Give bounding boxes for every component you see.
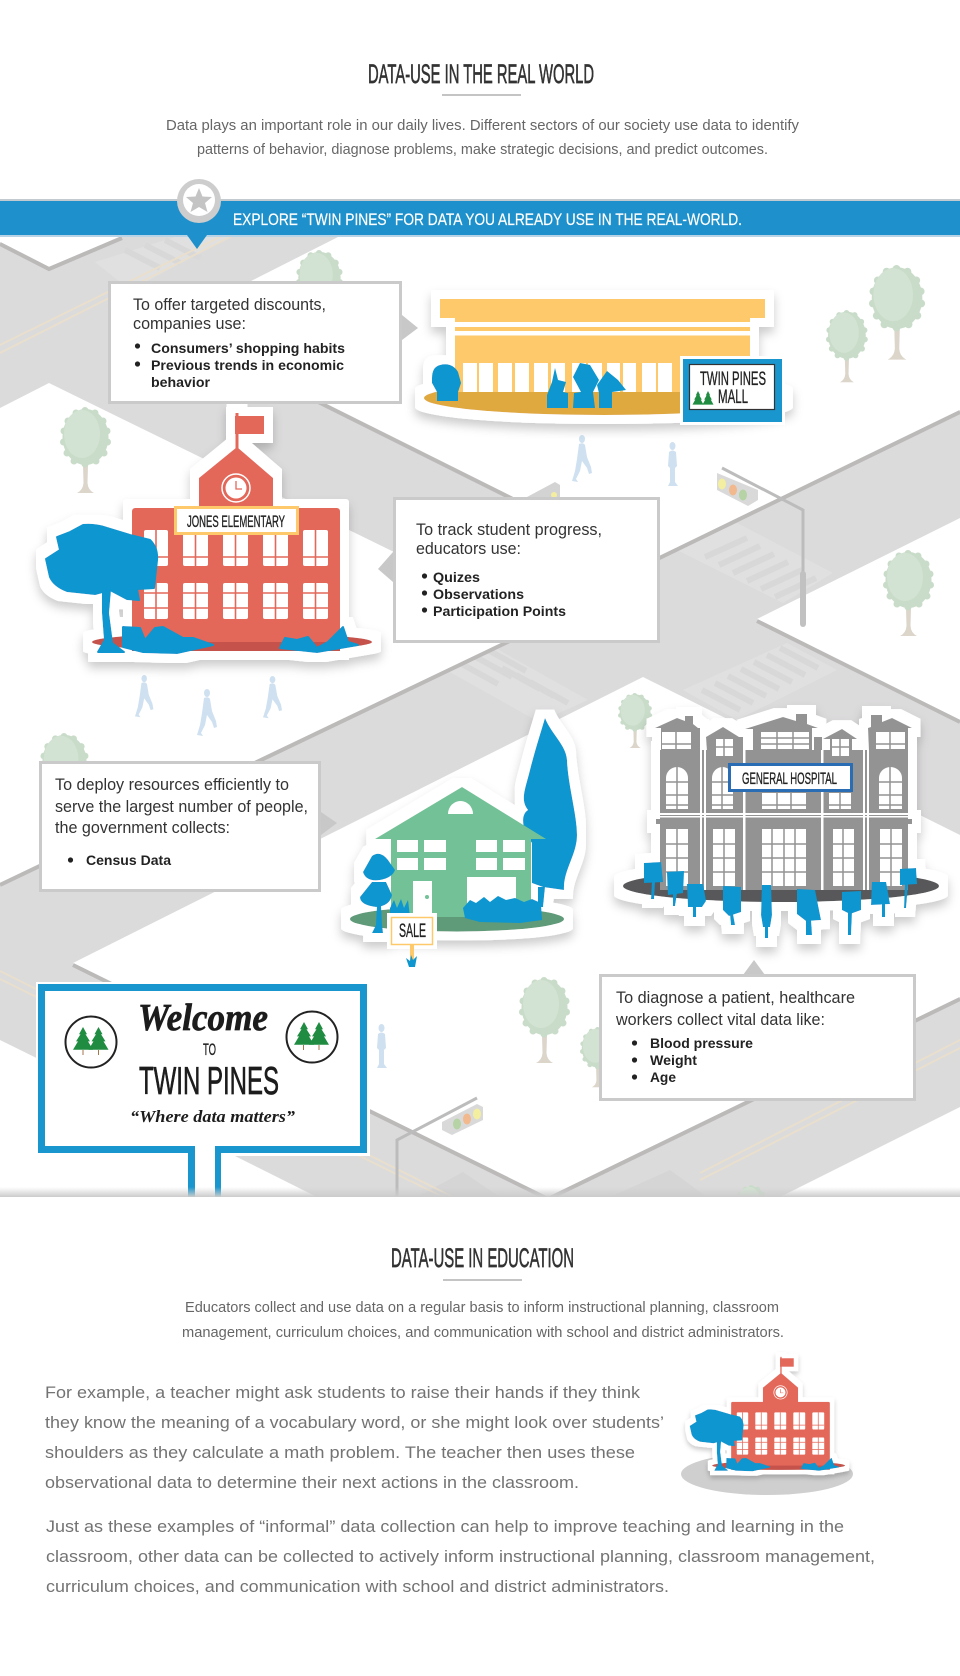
callout: census data: serve the largest number of people, — [55, 798, 308, 816]
text block: informal data collection: classroom, other data can be collected to actively inform instructional planning, classroom management, — [46, 1547, 875, 1566]
intro text block — [166, 117, 799, 158]
callout: census data: To deploy resources efficiently to — [55, 776, 289, 794]
traffic light: lower — [397, 1098, 483, 1197]
text block: informal data collection — [46, 1517, 875, 1596]
callout: targeted discounts: Previous trends in economic — [151, 358, 345, 373]
hospital name sign — [730, 764, 852, 790]
text block: informal data collection: Just as these examples of “informal” data collection can help to improve teaching and learning in the — [46, 1517, 844, 1536]
school name sign: JONES ELEMENTARY — [187, 513, 285, 531]
for sale sign — [387, 913, 437, 967]
banner: explore Twin Pines: EXPLORE “TWIN PINES” FOR DATA YOU ALREADY USE IN THE REAL-WORLD. — [233, 211, 742, 229]
emblem: right pines — [286, 1012, 338, 1062]
callout: vital data: To diagnose a patient, healthcare — [616, 989, 855, 1007]
welcome sign — [36, 982, 370, 1197]
text block: teacher example: they know the meaning of a vocabulary word, or she might look over students’ — [45, 1413, 664, 1432]
callout: census data: the government collects: — [55, 819, 230, 837]
intro text block: Data plays an important role in our daily lives. Different sectors of our society use data to identify — [166, 117, 799, 134]
mall sign — [680, 356, 785, 425]
building: house for sale — [350, 718, 577, 967]
callout: vital data: workers collect vital data like: — [615, 1011, 825, 1029]
callout: targeted discounts: Consumers’ shopping habits — [151, 341, 345, 356]
callout: census data — [40, 762, 337, 890]
callout: student progress: Observations — [433, 587, 524, 602]
education intro text block: Educators collect and use data on a regular basis to inform instructional planning, classroom — [185, 1299, 779, 1316]
callout: targeted discounts — [110, 282, 418, 402]
welcome sign: TWIN PINES — [139, 1060, 279, 1103]
emblem: left pines — [66, 1016, 116, 1068]
callout: vital data: Blood pressure — [650, 1036, 754, 1051]
icon: small school — [681, 1357, 853, 1495]
for sale sign: SALE — [399, 921, 426, 942]
traffic light: centre, mostly hidden — [527, 482, 560, 498]
welcome sign: Welcome — [138, 997, 268, 1039]
heading: data-use in the real world: DATA-USE IN THE REAL WORLD — [368, 59, 594, 89]
map: Twin Pines streets — [0, 236, 960, 1241]
callout: targeted discounts: companies use: — [133, 315, 246, 333]
callout: targeted discounts: To offer targeted discounts, — [133, 296, 326, 314]
mall sign: MALL — [718, 387, 748, 408]
intro text block: patterns of behavior, diagnose problems, make strategic decisions, and predict outcomes. — [197, 141, 768, 158]
callout: targeted discounts: behavior — [151, 375, 211, 390]
lower page background — [0, 1197, 960, 1676]
welcome sign: “Where data matters” — [130, 1107, 296, 1126]
pedestrians — [135, 435, 678, 1068]
callout: student progress: Participation Points — [433, 604, 566, 619]
trees along the streets — [40, 250, 934, 1241]
traffic light: upper right — [717, 468, 803, 624]
callout: student progress: To track student progress, — [416, 521, 602, 539]
callout: census data: Census Data — [86, 853, 172, 868]
callout: vital data: Weight — [650, 1053, 698, 1068]
heading: data-use in education: DATA-USE IN EDUCATION — [391, 1243, 574, 1273]
callout: student progress — [378, 498, 658, 642]
education intro text block: management, curriculum choices, and communication with school and district administrators. — [182, 1324, 784, 1341]
callout: student progress: educators use: — [416, 540, 521, 558]
text block: teacher example — [45, 1383, 664, 1492]
building: General Hospital — [623, 714, 939, 938]
school name sign — [176, 508, 298, 534]
callout: vital data: Age — [650, 1070, 676, 1085]
map bottom edge — [0, 1187, 960, 1197]
banner: explore Twin Pines — [0, 179, 960, 249]
hospital name sign: GENERAL HOSPITAL — [742, 770, 837, 788]
callout: vital data — [600, 960, 914, 1100]
icon: star marker — [177, 179, 221, 249]
text block: teacher example: For example, a teacher might ask students to raise their hands if they think — [45, 1383, 641, 1402]
text block: informal data collection: curriculum choices, and communication with school and district administrators. — [46, 1577, 669, 1596]
building: Twin Pines Mall — [424, 299, 785, 425]
education intro text block — [182, 1299, 784, 1341]
mall sign: TWIN PINES — [700, 369, 766, 390]
welcome sign: TO — [203, 1040, 216, 1059]
callout: student progress: Quizes — [433, 570, 480, 585]
text block: teacher example: observational data to determine their next actions in the classroom. — [45, 1473, 579, 1492]
building: Jones Elementary — [46, 413, 372, 653]
text block: teacher example: shoulders as they calculate a math problem. The teacher then uses these — [45, 1443, 635, 1462]
